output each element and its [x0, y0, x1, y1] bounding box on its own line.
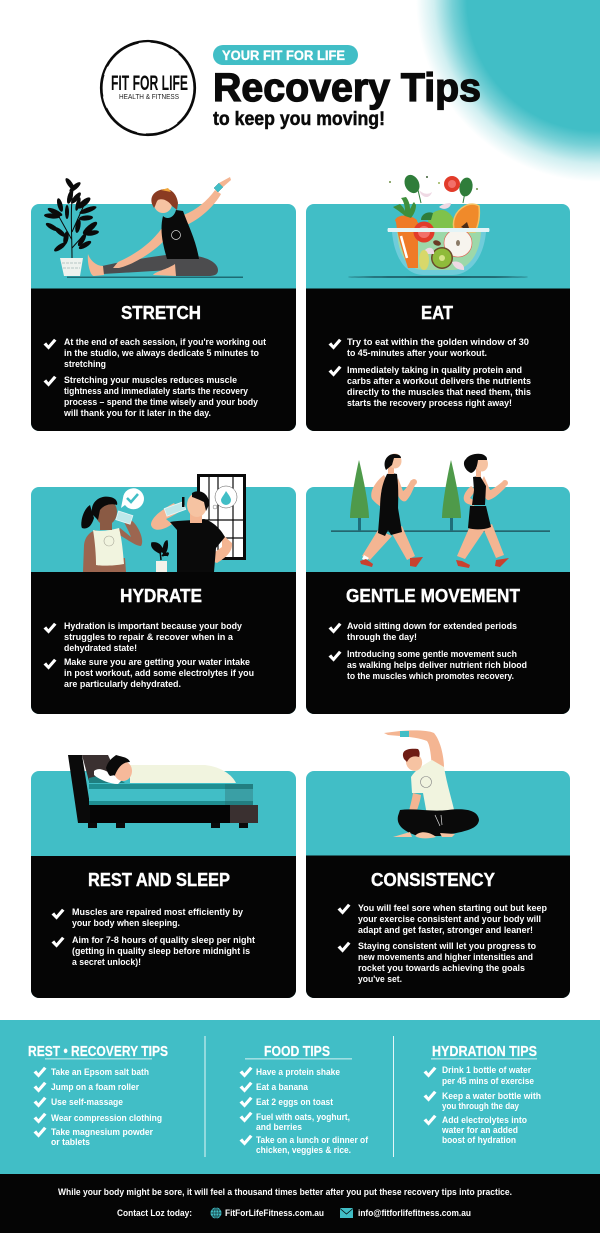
- panel: eat: [306, 172, 570, 431]
- column: hydration tips: HYDRATION TIPS: [432, 1044, 537, 1060]
- column: food tips: chicken, veggies & rice.: [256, 1145, 351, 1155]
- checklist: stretch: stretching: [64, 359, 106, 369]
- checklist: hydrate: Make sure you are getting your water intake: [64, 657, 250, 667]
- title: Recovery Tips: [213, 66, 481, 110]
- column: food tips: Fuel with oats, yoghurt,: [256, 1112, 350, 1122]
- checklist: eat: [328, 337, 531, 408]
- column: rest and recovery tips: Take an Epsom salt bath: [51, 1067, 149, 1077]
- illustration: two people drinking water: [81, 474, 246, 572]
- tips band: [0, 1020, 600, 1174]
- column: rest and recovery tips: REST • RECOVERY TIPS: [28, 1044, 168, 1060]
- checklist: rest and sleep: (getting in quality sleep before midnight is: [72, 946, 250, 956]
- column: hydration tips: water for an added: [441, 1125, 518, 1135]
- checklist: consistency: [338, 903, 547, 984]
- heading: eat: EAT: [421, 303, 453, 323]
- checklist: rest and sleep: Muscles are repaired most efficiently by: [72, 907, 244, 917]
- column: rest and recovery tips: or tablets: [51, 1137, 90, 1147]
- heading: stretch: STRETCH: [121, 303, 201, 323]
- logo: FIT FOR LIFE: [111, 72, 188, 95]
- logo: HEALTH & FITNESS: [119, 94, 179, 101]
- header: [101, 41, 481, 135]
- column: food tips: FOOD TIPS: [264, 1044, 330, 1060]
- column: hydration tips: boost of hydration: [442, 1135, 516, 1145]
- checklist: rest and sleep: your body when sleeping.: [72, 918, 180, 928]
- checklist: gentle movement: as walking helps deliver nutrient rich blood: [347, 660, 527, 670]
- checklist: consistency: Staying consistent will let you progress to: [358, 941, 536, 951]
- checklist: gentle movement: to the muscles which promotes recovery.: [347, 671, 514, 681]
- illustration: man doing seated side stretch: [384, 730, 479, 838]
- heading: gentle movement: GENTLE MOVEMENT: [346, 586, 520, 606]
- checklist: gentle movement: Introducing some gentle movement such: [347, 649, 517, 659]
- checklist: hydrate: Hydration is important because your body: [64, 621, 243, 631]
- checklist: eat: carbs after a workout delivers the nutrients: [347, 376, 531, 386]
- checklist: stretch: At the end of each session, if you're working out: [64, 337, 266, 347]
- column: hydration tips: Add electrolytes into: [442, 1115, 527, 1125]
- column: hydration tips: Keep a water bottle with: [442, 1091, 541, 1101]
- contact label: Contact Loz today:: [117, 1208, 192, 1218]
- checklist: hydrate: struggles to repair & recover when in a: [64, 632, 234, 642]
- column: food tips: and berries: [256, 1122, 302, 1132]
- checklist: eat: starts the recovery process right away!: [347, 398, 512, 408]
- column: rest and recovery tips: Take magnesium powder: [51, 1127, 153, 1137]
- column: rest and recovery tips: Use self-massage: [51, 1097, 123, 1107]
- column: hydration tips: Drink 1 bottle of water: [442, 1065, 531, 1075]
- column: hydration tips: [424, 1044, 541, 1145]
- checklist: gentle movement: [328, 621, 527, 681]
- background teal gradient blob: [410, 0, 600, 185]
- illustration: person sleeping in bed: [68, 755, 258, 828]
- checklist: hydrate: in post workout, add some electrolytes if you: [64, 668, 254, 678]
- checklist: consistency: You will feel sore when starting out but keep: [358, 903, 547, 913]
- column: hydration tips: you through the day: [442, 1101, 519, 1111]
- panel: rest and sleep: [31, 755, 296, 998]
- checklist: eat: Immediately taking in quality protein and: [347, 365, 522, 375]
- logo: [101, 41, 195, 135]
- checklist: stretch: tightness and immediately starts the recovery: [64, 386, 249, 396]
- checklist: rest and sleep: [52, 907, 255, 967]
- checklist: stretch: Stretching your muscles reduces muscle: [64, 375, 237, 385]
- checklist: stretch: in the studio, we always dedicate 5 minutes to: [64, 348, 259, 358]
- column: food tips: Have a protein shake: [256, 1067, 340, 1077]
- icon: globe: [210, 1208, 222, 1218]
- checklist: consistency: rocket you towards achieving the goals: [358, 963, 525, 973]
- heading: consistency: CONSISTENCY: [371, 870, 495, 890]
- checklist: gentle movement: Avoid sitting down for extended periods: [347, 621, 517, 631]
- checklist: stretch: [44, 337, 266, 418]
- checklist: rest and sleep: a secret unlock)!: [72, 957, 141, 967]
- panel: gentle movement: [306, 454, 570, 714]
- checklist: hydrate: [44, 621, 254, 689]
- checklist: consistency: new movements and higher intensities and: [358, 952, 533, 962]
- checklist: rest and sleep: Aim for 7-8 hours of quality sleep per night: [72, 935, 255, 945]
- checklist: stretch: process – spend the time wisely and your body: [64, 397, 259, 407]
- panel: consistency: [306, 730, 570, 998]
- checklist: eat: Try to eat within the golden window of 30: [347, 337, 529, 347]
- column: rest and recovery tips: Jump on a foam roller: [51, 1082, 139, 1092]
- panel: hydrate: [31, 474, 296, 714]
- checklist: consistency: your exercise consistent and your body will: [358, 914, 541, 924]
- column: rest and recovery tips: [28, 1044, 168, 1147]
- heading: hydrate: HYDRATE: [120, 586, 202, 606]
- illustration: woman stretching beside plant: [44, 177, 243, 278]
- badge: your fit for life: [213, 45, 358, 65]
- checklist: consistency: adapt and get faster, stronger and leaner!: [358, 925, 533, 935]
- checklist: gentle movement: through the day!: [347, 632, 417, 642]
- column: hydration tips: per 45 mins of exercise: [442, 1076, 534, 1086]
- email: info@fitforlifefitness.com.au: [358, 1208, 471, 1218]
- checklist: eat: to 45-minutes after your workout.: [347, 348, 487, 358]
- website: FitForLifeFitness.com.au: [225, 1208, 324, 1218]
- illustration: two people walking with trees: [331, 454, 550, 568]
- checklist: consistency: you've set.: [358, 974, 402, 984]
- badge: your fit for life: YOUR FIT FOR LIFE: [222, 48, 345, 63]
- column: food tips: Eat 2 eggs on toast: [256, 1097, 333, 1107]
- illustration: salad bowl: [348, 172, 528, 278]
- closing statement: While your body might be sore, it will feel a thousand times better after you put these recovery tips into practice.: [58, 1187, 512, 1197]
- column: food tips: Take on a lunch or dinner of: [256, 1135, 369, 1145]
- panel: stretch: [31, 177, 296, 431]
- icon: mail: [340, 1208, 353, 1218]
- subtitle: to keep you moving!: [213, 109, 385, 130]
- checklist: hydrate: are particularly dehydrated.: [64, 679, 181, 689]
- checklist: hydrate: dehydrated state!: [64, 643, 137, 653]
- checklist: eat: directly to the muscles that need them, this: [347, 387, 531, 397]
- column: food tips: [240, 1044, 369, 1155]
- column: food tips: Eat a banana: [256, 1082, 309, 1092]
- footer: [0, 1174, 600, 1233]
- column: rest and recovery tips: Wear compression clothing: [51, 1113, 162, 1123]
- heading: rest and sleep: REST AND SLEEP: [88, 870, 230, 890]
- checklist: stretch: will thank you for it later in the day.: [63, 408, 211, 418]
